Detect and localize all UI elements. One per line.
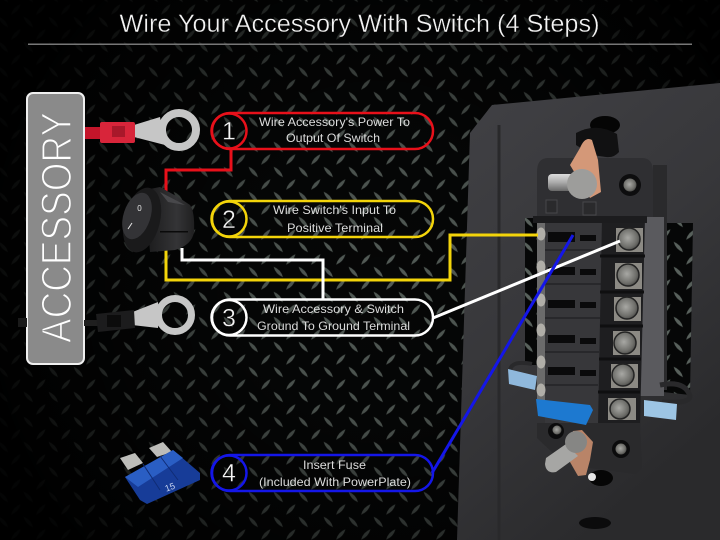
- terminal column: [598, 218, 645, 426]
- plus marks: [546, 200, 596, 215]
- step 2 callout: [212, 201, 433, 237]
- fuse slots: [548, 232, 596, 376]
- left edge strip: [537, 218, 546, 400]
- photo: metal panel with fuse block: [457, 83, 720, 540]
- left blue connector: [508, 363, 537, 390]
- copper lug top: [570, 139, 601, 198]
- panel plate: [457, 83, 720, 540]
- step 3 callout: [212, 300, 433, 336]
- step 4 callout: Insert Fuse: [303, 458, 366, 472]
- wire: white from switch: [182, 248, 323, 300]
- black looped wire: [576, 128, 619, 157]
- icon: rocker switch: [117, 184, 194, 256]
- step 1 callout: Wire Accessory's Power To: [259, 115, 410, 129]
- top-right screw: [619, 174, 641, 196]
- step 2 callout: Wire Switch's Input To: [273, 203, 396, 217]
- step 3 callout: Wire Accessory & Switch: [263, 302, 404, 316]
- icon: black ring terminal: [18, 298, 192, 332]
- step 3 callout: 3: [222, 304, 236, 332]
- panel lower holes: [579, 470, 613, 529]
- title: Wire Your Accessory With Switch (4 Steps): [120, 10, 600, 38]
- icon: blue fuse: [120, 442, 200, 504]
- step 1 callout: 1: [222, 118, 236, 146]
- wire: red to switch: [166, 148, 231, 192]
- right window: [663, 223, 693, 395]
- left small screws: [536, 228, 546, 396]
- title rule: [28, 44, 692, 45]
- step 2 callout: 2: [222, 206, 236, 234]
- step 4 callout: [212, 455, 433, 491]
- label: accessory: ACCESSORY: [33, 112, 81, 343]
- step 2 callout: Positive Terminal: [287, 221, 383, 235]
- lower hole screws: [548, 423, 630, 458]
- terminal plates: [608, 228, 643, 420]
- step 3 callout: Ground To Ground Terminal: [257, 319, 410, 333]
- left window: [525, 218, 547, 365]
- fuse block upper housing: [537, 158, 653, 222]
- icon: blue fuse: 15: [164, 481, 176, 494]
- top nut: [567, 169, 597, 199]
- step 1 callout: [212, 113, 433, 149]
- step 1 callout: Output Of Switch: [286, 131, 380, 145]
- wire: blue to fuse: [432, 235, 573, 473]
- inserted blue fuse: [536, 399, 593, 425]
- step 4 callout: (Included With PowerPlate): [259, 475, 411, 489]
- icon: red ring terminal: [85, 113, 196, 147]
- bottom nut: [565, 431, 587, 453]
- step 4 callout: 4: [222, 460, 236, 488]
- top mounting hole: [590, 116, 620, 134]
- panel fold: [498, 125, 500, 540]
- lower housing: [537, 423, 642, 474]
- wire: yellow to positive terminal: [166, 235, 538, 280]
- right blue connector: [644, 384, 690, 420]
- top stud: [548, 174, 574, 191]
- wire: white to ground terminal: [433, 241, 620, 318]
- top bar of block: [533, 216, 647, 223]
- terminal screws: [610, 228, 640, 419]
- bay dividers: [545, 250, 601, 385]
- terminal separators: [597, 256, 645, 427]
- fuse column: [545, 218, 602, 425]
- copper lug bottom: [570, 430, 593, 476]
- side strip: [638, 217, 664, 396]
- block shadow: [653, 165, 667, 390]
- bottom stud: [545, 444, 578, 472]
- icon: rocker switch: 0: [137, 204, 142, 213]
